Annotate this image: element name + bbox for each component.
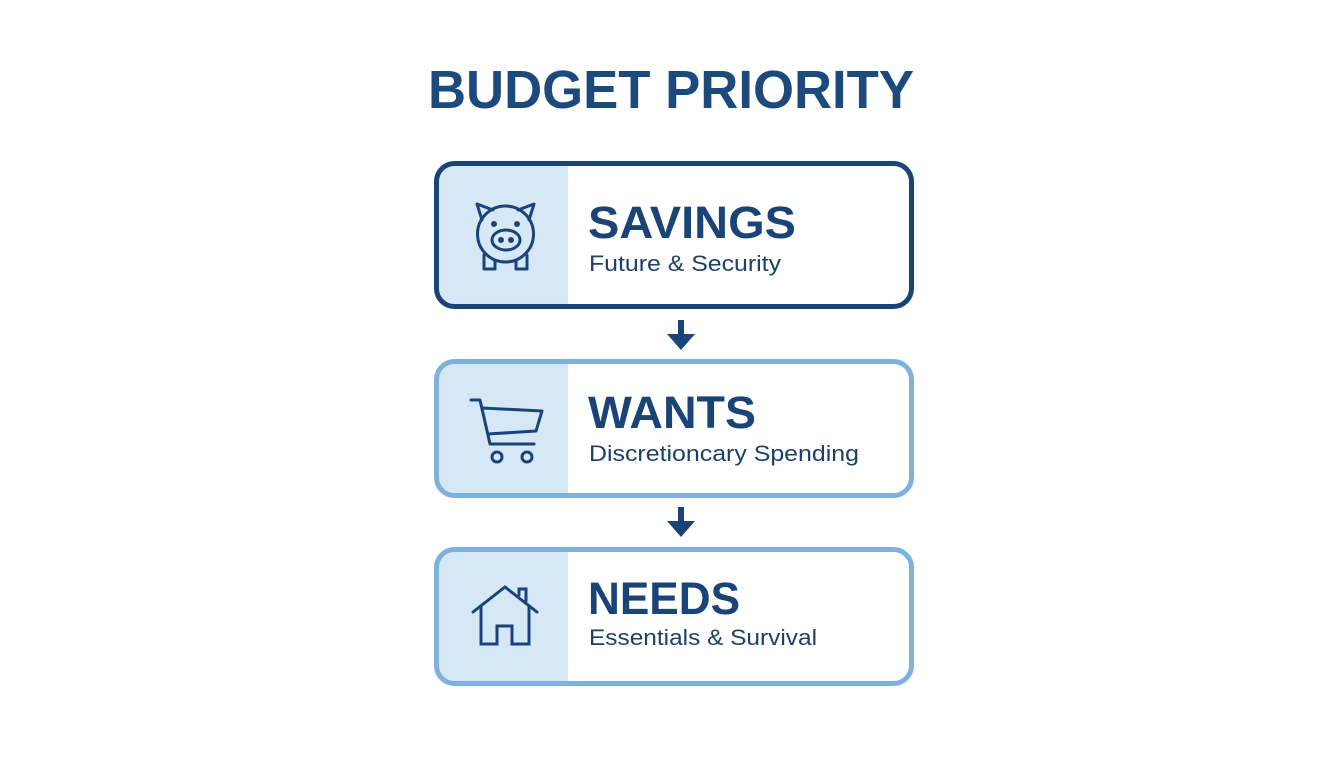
text: savings subtitle: Future & Security (589, 251, 781, 276)
text: wants subtitle: Discretioncary Spending (589, 441, 859, 466)
title: BUDGET PRIORITY (428, 60, 914, 120)
arrow 1 (667, 320, 695, 350)
heading: savings: SAVINGS (588, 197, 796, 248)
arrow 2 (667, 507, 695, 537)
heading: wants: WANTS (588, 387, 756, 438)
icon: piggy bank (477, 204, 534, 269)
icon: shopping cart (471, 400, 542, 462)
icon: house (473, 587, 537, 644)
panel: wants (436, 361, 912, 496)
heading: needs: NEEDS (588, 573, 740, 624)
panel: savings (436, 163, 912, 307)
text: needs subtitle: Essentials & Survival (589, 625, 817, 650)
panel: needs (436, 549, 912, 684)
